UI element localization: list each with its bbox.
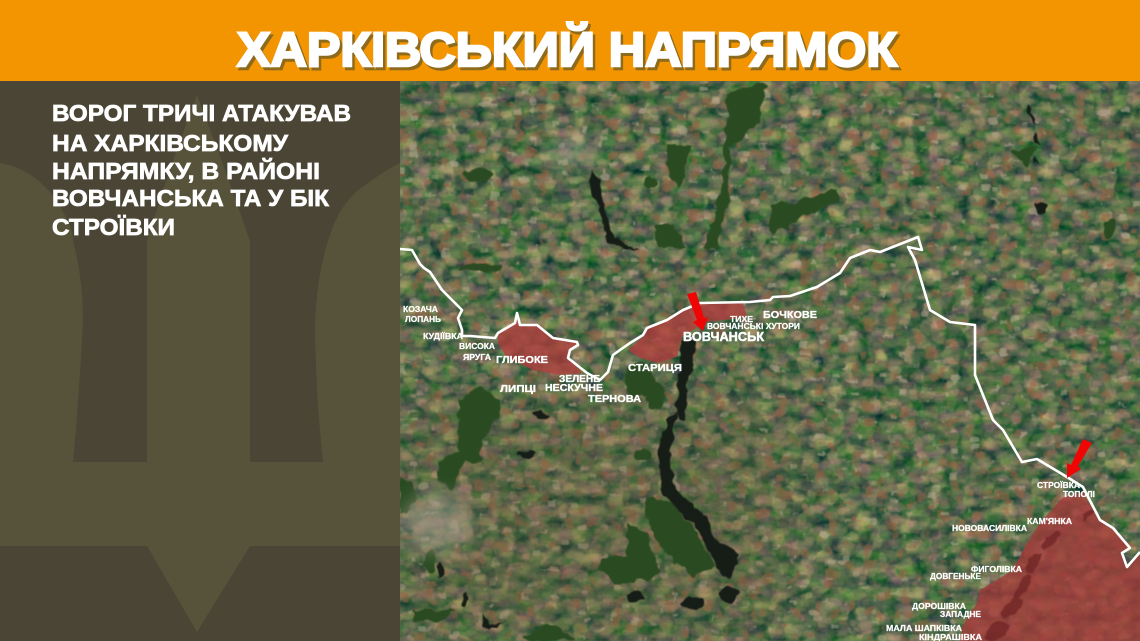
dark forest strip inside red zone (982, 509, 1094, 641)
label: Bochkove: БОЧКОВЕ (763, 309, 817, 321)
label: Vysoka: ВИСОКА (459, 341, 495, 351)
label: Mala Shapkivka: МАЛА ШАПКІВКА (886, 623, 962, 633)
label: Starytsia: СТАРИЦЯ (628, 362, 682, 374)
text block: summary: ВОРОГ ТРИЧІ АТАКУВАВ (52, 100, 351, 126)
label: Dovhenke: ДОВГЕНЬКЕ (930, 571, 981, 581)
header bar (0, 0, 1140, 81)
label: Lopan: ЛОПАНЬ (405, 314, 441, 324)
arrow: Vovchansk attack (687, 292, 708, 331)
map label group (403, 304, 1095, 641)
label: Liptsi: ЛИПЦІ (500, 383, 536, 395)
label: Stroyivka: СТРОЇВКА (1037, 480, 1080, 490)
label: Zapadne: ЗАПАДНЕ (940, 609, 981, 619)
title: ХАРКІВСЬКИЙ НАПРЯМОК (237, 22, 898, 77)
label: Vovchanski Khutory: ВОВЧАНСЬКІ ХУТОРИ (707, 321, 800, 331)
text block: summary: СТРОЇВКИ (52, 214, 175, 240)
title: ХАРКІВСЬКИЙ НАПРЯМОК (240, 25, 900, 80)
label: Novovasylivka: НОВОВАСИЛІВКА (952, 523, 1027, 533)
panel: left text panel (0, 81, 400, 641)
label: Doroshivka: ДОРОШІВКА (912, 601, 966, 611)
label: Neskuchne: НЕСКУЧНЕ (545, 382, 603, 394)
label: Ternova: ТЕРНОВА (588, 393, 641, 405)
label: Tykhe: ТИХЕ (730, 314, 753, 324)
text block: summary: НАПРЯМКУ, В РАЙОНІ (52, 157, 320, 184)
red zone: Hlyboke (498, 313, 582, 375)
red zone: south-east (960, 492, 1140, 641)
label: Topoli: ТОПОЛІ (1063, 489, 1095, 499)
label: Vovchansk: ВОВЧАНСЬК (683, 330, 764, 344)
label: Kozacha: КОЗАЧА (403, 304, 438, 314)
label: Fyholivka: ФИГОЛІВКА (971, 564, 1022, 574)
label: Kudiivka: КУДІЇВКА (423, 331, 463, 341)
text block: summary: ВОВЧАНСЬКА ТА У БІК (52, 185, 330, 211)
map: forests (400, 84, 1116, 641)
label: Hlyboke: ГЛИБОКЕ (496, 354, 548, 366)
text block: summary (52, 100, 351, 240)
border line (400, 237, 1140, 567)
map: satellite background (400, 81, 1140, 641)
label: Yaruha: ЯРУГА (463, 352, 491, 362)
label: Zelene: ЗЕЛЕНЕ (559, 373, 600, 385)
map: towns (401, 137, 597, 553)
arrow: Stroyivka attack (1067, 439, 1092, 478)
red zone: Vovchansk (628, 303, 747, 363)
text block: summary: НА ХАРКІВСЬКОМУ (52, 130, 289, 156)
icon: trident watermark (0, 95, 400, 632)
map: rivers and reservoirs (437, 104, 1048, 630)
label: Kamianka: КАМ'ЯНКА (1027, 516, 1072, 526)
